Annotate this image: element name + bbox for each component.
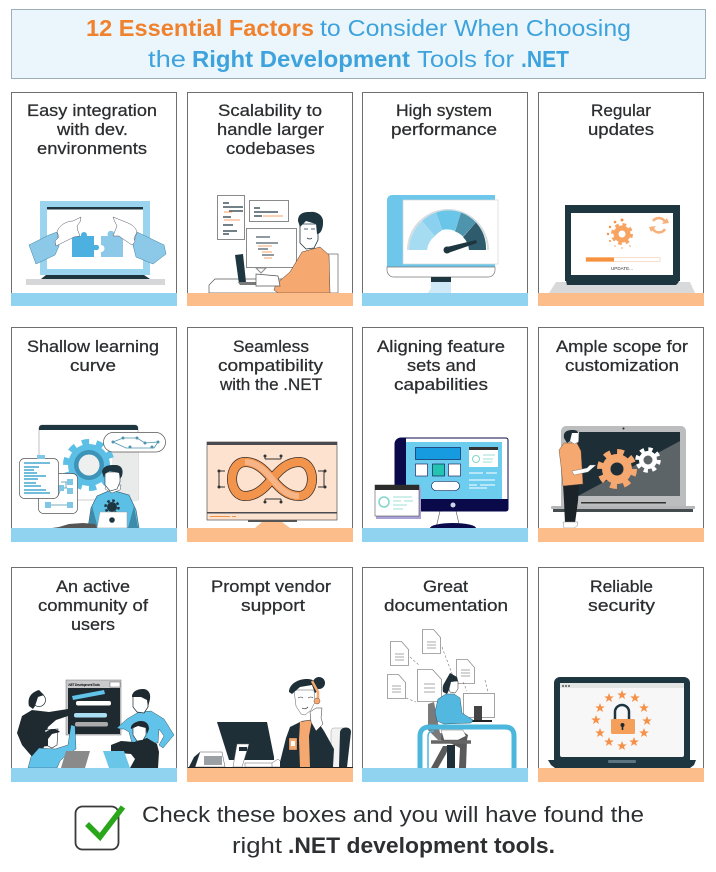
heading: feature sets: Aligning feature [377,338,505,356]
panel: compatibility [188,328,352,528]
footer bar: blue [11,768,177,782]
heading: documentation: Great [423,578,469,596]
heading: community: community of [38,597,149,615]
icon: person presenting gears on laptop [551,426,695,528]
heading: compatibility: Seamless [233,338,309,356]
icon: green checkbox [76,806,123,850]
title banner: 12 Essential Factors [86,15,314,41]
footer bar: blue [362,293,528,306]
heading: compatibility: with the .NET [219,376,322,394]
heading: compatibility: compatibility [218,357,324,375]
heading: scalability [217,102,325,158]
heading: system performance [391,102,497,139]
panel: feature sets [362,328,528,533]
heading: learning curve: curve [70,357,116,375]
icon: developer with code windows [209,196,338,293]
heading: compatibility [218,338,324,394]
icon: developer with gear and diagrams [20,425,166,528]
title banner: Tools for [417,46,514,72]
heading: vendor support: Prompt vendor [211,578,332,596]
title banner: .NET [521,46,569,72]
icon: monitor with infinity loop [207,442,337,528]
icon: monitor with feature dashboard [375,438,508,533]
heading: scalability: handle larger [217,121,325,139]
heading: learning curve [27,338,159,375]
heading: feature sets [377,338,505,394]
panel: regular updates [538,92,704,294]
icon: laptop with update screen: UPDATE... [611,266,633,271]
heading: feature sets: sets and [407,357,476,375]
panel: learning curve [12,328,176,528]
heading: customization [556,338,689,375]
footer bar: blue [11,293,177,306]
panel: system performance [362,92,528,294]
heading: security: Reliable [590,578,653,596]
heading: customization: customization [565,357,679,375]
footer bar: blue [11,528,177,542]
title banner: to Consider When Choosing [320,15,631,41]
panel: community [12,568,176,768]
footer bar: blue [362,768,528,782]
footer bar: orange [538,293,704,306]
panel: documentation [362,568,528,768]
heading: system performance: High system [396,102,492,120]
icon: team around a screen: .NET Development Tools [68,683,100,687]
closing message: Check these boxes and you will have found the [142,802,644,827]
heading: documentation [384,578,508,615]
icon: team around a screen [17,680,174,768]
heading: regular updates: Regular [591,102,652,120]
heading: vendor support: support [241,597,306,615]
icon: woman at desk with documents [388,630,514,768]
footer bar: orange [538,768,704,782]
heading: security [588,578,656,615]
icon: support agent at desk [188,677,353,768]
heading: scalability: Scalability to [218,102,322,120]
closing message: .NET development tools. [288,833,555,858]
panel: easy integration [12,92,176,294]
footer bar: orange [187,768,353,782]
icon: monitor with gauge [387,195,498,293]
title banner: Right Development [192,46,410,72]
heading: learning curve: Shallow learning [27,338,159,356]
icon: laptop with puzzle pieces [26,201,166,285]
heading: system performance: performance [391,121,497,139]
panel: customization [538,328,704,528]
panel: security [538,568,704,768]
icon: laptop with padlock and stars [548,677,696,768]
heading: scalability: codebases [226,140,315,158]
title banner [12,10,706,78]
footer bar: orange [187,528,353,542]
panel: scalability [188,92,352,294]
closing message: right [232,833,283,858]
footer bar: orange [538,528,704,542]
heading: community [38,578,149,634]
footer bar: blue [362,528,528,542]
heading: security: security [588,597,656,615]
heading: easy integration: Easy integration [27,102,157,120]
heading: feature sets: capabilities [394,376,488,394]
heading: easy integration: with dev. [56,121,128,139]
panel: vendor support [188,568,353,768]
footer bar: orange [187,293,353,306]
heading: easy integration: environments [37,140,147,158]
heading: community: users [71,616,115,634]
heading: vendor support [211,578,332,615]
icon: laptop with update screen [549,205,695,293]
heading: regular updates: updates [588,121,654,139]
heading: community: An active [56,578,130,596]
closing message [142,802,644,858]
heading: easy integration [27,102,157,158]
title banner: the [148,46,186,72]
heading: customization: Ample scope for [556,338,689,356]
heading: documentation: documentation [384,597,508,615]
heading: regular updates [588,102,654,139]
